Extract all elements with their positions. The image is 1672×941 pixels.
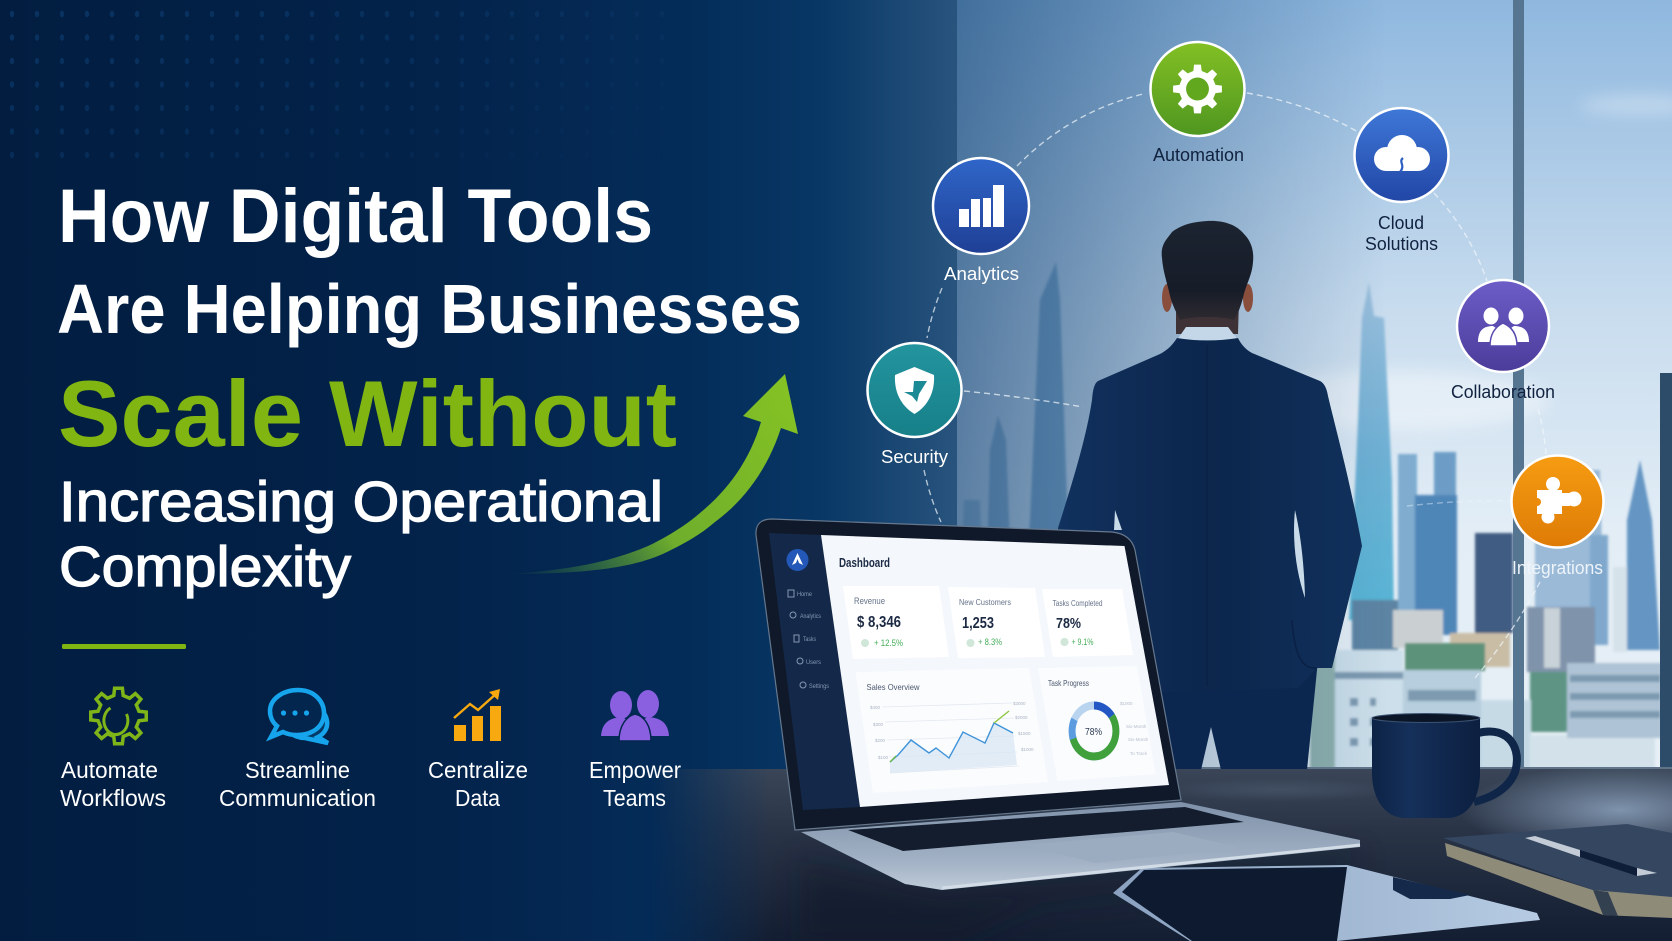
headline line: How Digital Tools: How Digital Tools	[58, 174, 653, 259]
card: revenue	[843, 586, 949, 659]
feature: automate workflows	[60, 688, 166, 811]
card: sales overview line chart: $1000	[1021, 747, 1034, 752]
card: sales overview line chart: $100	[878, 755, 889, 760]
coffee mug	[1372, 714, 1517, 818]
card: revenue: $ 8,346	[857, 614, 901, 631]
dashboard sidebar: Tasks	[803, 637, 816, 643]
card: sales overview line chart	[856, 668, 1048, 793]
card: sales overview line chart: $400	[870, 705, 881, 710]
card: sales overview line chart: $300	[873, 722, 884, 727]
card: revenue: Revenue	[854, 596, 885, 606]
card: task progress donut: $1000	[1120, 701, 1133, 706]
node: cloud solutions	[1354, 108, 1448, 254]
dashboard sidebar	[769, 533, 860, 810]
tablet	[1113, 865, 1540, 941]
dashboard screen	[821, 535, 1169, 807]
node: security: Security	[881, 447, 948, 467]
card: sales overview line chart: $3000	[1013, 701, 1026, 706]
headline line: Increasing Operational: Increasing Operational	[59, 470, 663, 534]
feature: centralize data: Centralize	[428, 757, 528, 783]
node: analytics: Analytics	[944, 264, 1019, 284]
notebook and pen	[1443, 824, 1672, 918]
dashboard sidebar: Settings	[809, 684, 829, 690]
dashboard title: Dashboard	[839, 556, 890, 570]
feature: empower teams	[589, 690, 681, 811]
card: new customers: 1,253	[962, 615, 994, 632]
node: automation: Automation	[1153, 145, 1244, 165]
feature: streamline communication	[219, 690, 376, 811]
card: tasks completed: Tasks Completed	[1052, 598, 1103, 608]
node: integrations	[1512, 456, 1604, 578]
icon: team	[1478, 308, 1529, 346]
headline	[57, 174, 802, 599]
card: task progress donut: Six-Month	[1128, 737, 1149, 742]
growth arrow	[508, 374, 798, 574]
node: cloud solutions: Cloud	[1378, 213, 1424, 233]
icon: rising bars	[454, 689, 501, 741]
feature row	[60, 688, 681, 811]
laptop	[756, 519, 1360, 890]
background: dot pattern	[10, 10, 639, 158]
icon: people	[601, 690, 669, 741]
feature: automate workflows: Workflows	[60, 785, 166, 811]
businessman seen from behind	[1058, 221, 1362, 770]
desk	[600, 765, 1672, 941]
card: tasks completed	[1042, 589, 1133, 657]
card: task progress donut: Six-Month	[1126, 724, 1147, 729]
icon: puzzle	[1533, 477, 1582, 524]
feature: centralize data	[428, 689, 528, 811]
window view with city skyline	[957, 0, 1672, 775]
node: security	[868, 343, 962, 467]
card: sales overview line chart: $1500	[1018, 731, 1031, 736]
card: tasks completed: + 9.1%	[1072, 637, 1094, 647]
feature: empower teams: Empower	[589, 757, 681, 783]
card: sales overview line chart: Sales Overview	[866, 682, 920, 692]
dashboard sidebar: Home	[797, 592, 813, 598]
headline line: Are Helping Businesses: Are Helping Businesses	[57, 270, 802, 348]
card: task progress donut: 78%	[1085, 727, 1102, 738]
node: cloud solutions: Solutions	[1365, 234, 1438, 254]
icon: shield	[895, 367, 934, 414]
feature: streamline communication: Communication	[219, 785, 376, 811]
card: sales overview line chart: $200	[875, 738, 886, 743]
headline line: Scale Without: Scale Without	[58, 361, 677, 466]
card: tasks completed: 78%	[1056, 615, 1081, 632]
icon: bars	[959, 185, 1004, 227]
window frames	[1000, 0, 1672, 798]
card: task progress donut	[1038, 666, 1156, 781]
connecting dashed arcs	[924, 93, 1546, 678]
feature: empower teams: Teams	[603, 785, 666, 811]
icon: gear	[91, 688, 146, 744]
feature: centralize data: Data	[455, 785, 500, 811]
feature: streamline communication: Streamline	[245, 757, 350, 783]
laptop base and keyboard	[801, 802, 1360, 890]
dashboard sidebar: Analytics	[800, 614, 821, 620]
green divider	[62, 644, 186, 649]
node: collaboration: Collaboration	[1451, 382, 1555, 402]
card: new customers	[948, 587, 1045, 658]
card: new customers: New Customers	[959, 597, 1011, 607]
laptop reflection on desk	[800, 852, 1360, 941]
card: task progress donut: Task Progress	[1048, 678, 1089, 688]
feature: automate workflows: Automate	[61, 757, 158, 783]
node: integrations: Integrations	[1512, 558, 1603, 578]
node: automation	[1150, 42, 1244, 165]
card: task progress donut: To Track	[1130, 751, 1148, 756]
card: new customers: + 8.3%	[978, 637, 1002, 647]
icon: chat bubbles	[270, 690, 328, 743]
laptop lid	[756, 519, 1181, 830]
dashboard sidebar: Users	[806, 660, 821, 666]
card: revenue: + 12.5%	[874, 638, 903, 648]
node: analytics	[933, 158, 1029, 284]
headline line: Complexity: Complexity	[59, 535, 352, 599]
icon: gear	[1173, 65, 1222, 113]
card: sales overview line chart: $2000	[1015, 715, 1028, 720]
icon: cloud	[1374, 135, 1430, 172]
node: collaboration	[1451, 280, 1555, 402]
